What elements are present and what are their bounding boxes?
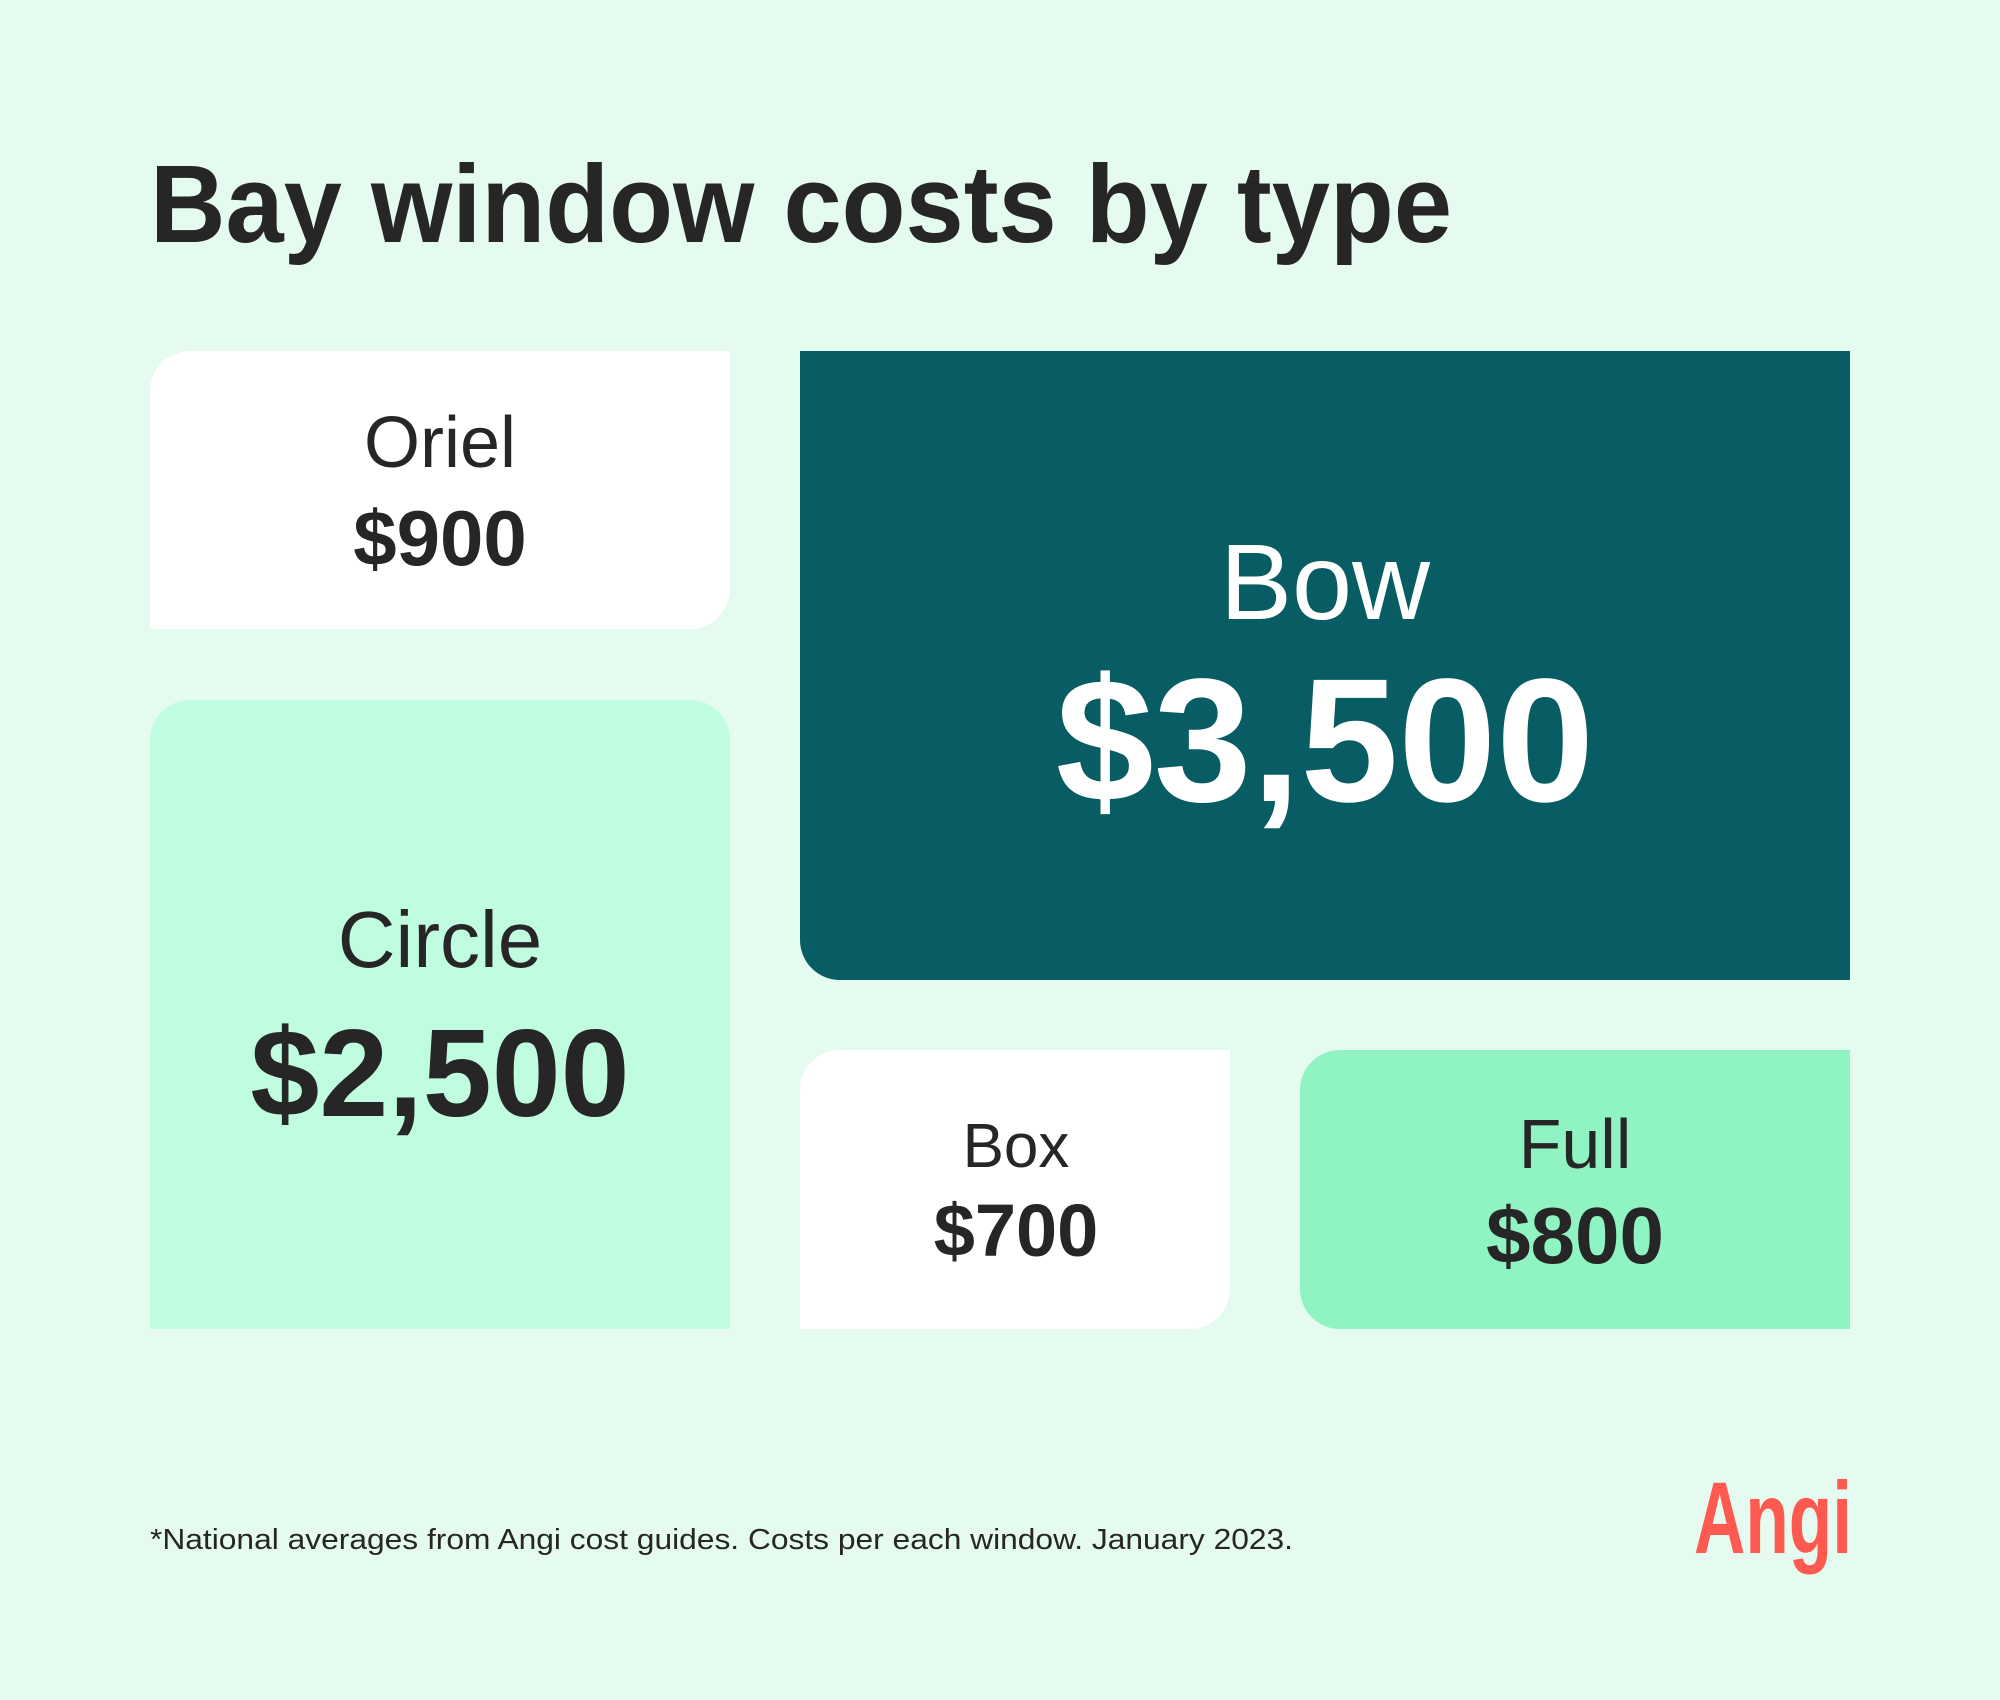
circle label: Circle: [338, 895, 542, 984]
box price: $700: [934, 1189, 1098, 1272]
panel: full: [1300, 1050, 1850, 1329]
panel: box: [800, 1050, 1230, 1329]
oriel price: $900: [353, 494, 527, 582]
bow label: Bow: [1220, 521, 1431, 642]
oriel label: Oriel: [364, 403, 516, 483]
circle price: $2,500: [250, 1005, 630, 1143]
full price: $800: [1486, 1191, 1664, 1280]
full label: Full: [1519, 1105, 1631, 1183]
footnote: *National averages from Angi cost guides. Costs per each window. January 2023.: [150, 1524, 1293, 1556]
bow price: $3,500: [1056, 643, 1594, 839]
panel: bow: [800, 351, 1850, 980]
panel: circle: [150, 700, 730, 1329]
panel: oriel: [150, 351, 730, 629]
title: Bay window costs by type: [150, 143, 1452, 266]
logo: Angi: Angi: [1694, 1461, 1852, 1575]
box label: Box: [963, 1112, 1069, 1181]
